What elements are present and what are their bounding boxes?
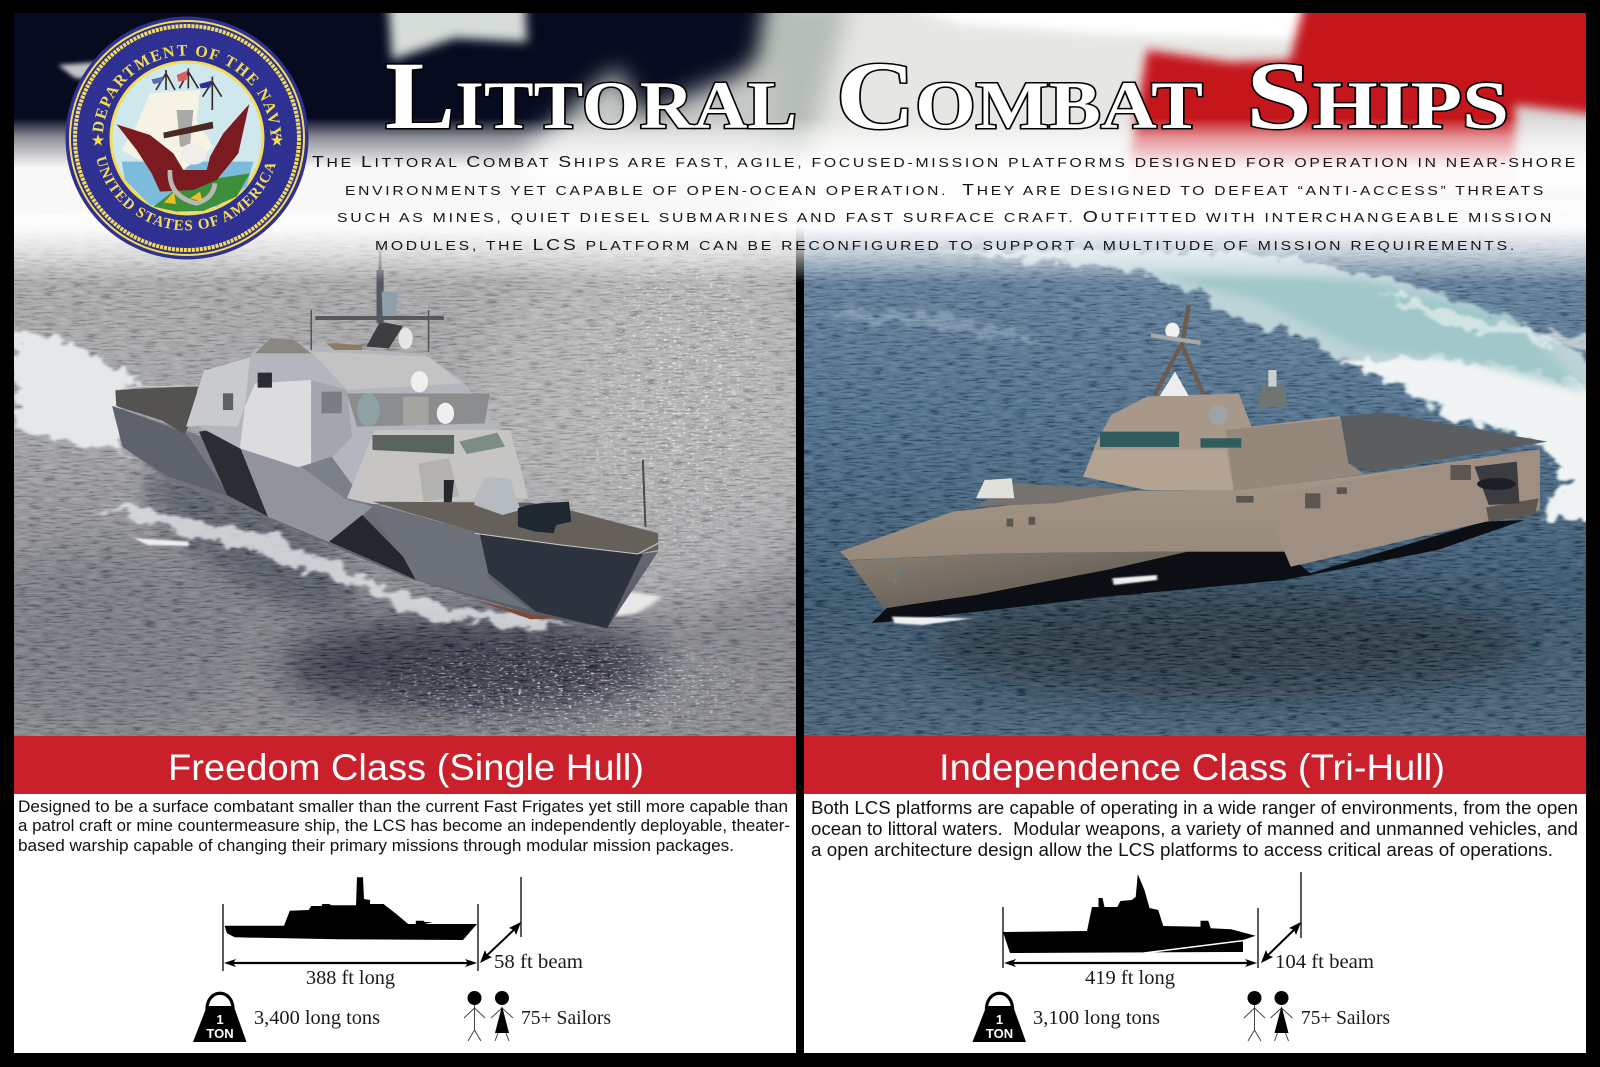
bridge block xyxy=(347,430,528,504)
heading band: Freedom class xyxy=(14,736,796,794)
icon: one ton weight xyxy=(972,993,1026,1042)
hull underside shadow xyxy=(871,520,1524,623)
seal: Department of the Navy xyxy=(66,16,308,260)
heading band: Freedom class: Freedom Class (Single Hull) xyxy=(168,747,644,788)
header white fade xyxy=(14,118,1586,283)
superstructure xyxy=(1083,393,1364,491)
photo: Independence class trimaran at sea xyxy=(804,200,1596,736)
intro paragraph: SUCH AS MINES, QUIET DIESEL SUBMARINES AND FAST SURFACE CRAFT. O UTFITTED WITH INTERCHANGEABLE MISSION xyxy=(337,209,1554,226)
intro paragraph: ENVIRONMENTS YET CAPABLE OF OPEN-OCEAN OPERATION. THEY ARE DESIGNED TO DEFEAT “ANTI-ACCESS” THREATS xyxy=(345,182,1546,199)
flag: stars xyxy=(388,0,527,60)
panel: Freedom class xyxy=(14,736,796,1053)
beam label: 58 ft beam xyxy=(494,952,583,973)
panel background xyxy=(14,794,796,1053)
length label: 419 ft long xyxy=(1085,968,1175,989)
bow jackstaff xyxy=(643,460,645,527)
crew on deck xyxy=(518,502,571,533)
main hull xyxy=(840,449,1540,567)
flag: white stripe xyxy=(756,13,1302,167)
description text: a patrol craft or mine countermeasure ship, the LCS has become an independently deployable, theater- xyxy=(18,816,790,835)
photo: Freedom class ship at sea xyxy=(14,228,796,736)
bow lower hull xyxy=(848,552,1188,608)
panel background xyxy=(804,794,1586,1053)
heading band: Independence class xyxy=(804,736,1586,794)
icon: one ton weight: 1 xyxy=(996,1012,1003,1027)
seal lettering: UNITED STATES OF AMERICA xyxy=(97,156,276,230)
description text: Both LCS platforms are capable of operating in a wide ranger of environments, from the open xyxy=(811,797,1578,818)
flight deck xyxy=(1341,413,1547,472)
mast xyxy=(366,322,403,348)
hull xyxy=(112,406,658,628)
description text: based warship capable of changing their primary missions through modular mission packages. xyxy=(18,836,734,855)
ship silhouette: Independence xyxy=(1003,874,1256,953)
description text xyxy=(18,797,790,855)
description text xyxy=(811,797,1578,860)
beam label: 104 ft beam xyxy=(1275,952,1374,973)
black column divider xyxy=(796,245,804,736)
intro paragraph: THE LITTORAL C OMBAT SHIPS ARE FAST, AGILE, FOCUSED-MISSION PLATFORMS DESIGNED FOR OPERATION IN NEAR-SHORE xyxy=(312,154,1578,171)
icon: one ton weight: TON xyxy=(986,1026,1013,1041)
icon: one ton weight: 1 xyxy=(216,1012,224,1027)
length dimension xyxy=(1003,907,1258,968)
mast xyxy=(1155,305,1203,395)
icon: sailors xyxy=(464,991,513,1041)
photo: Independence class trimaran at sea: 4 xyxy=(884,566,901,588)
CIWS xyxy=(1257,385,1287,408)
length label: 388 ft long xyxy=(306,968,395,989)
boat bay xyxy=(1474,462,1519,505)
wake: stern foam xyxy=(14,330,138,450)
foam along hull xyxy=(892,617,973,625)
radar housing band xyxy=(347,393,490,427)
domes xyxy=(357,393,380,427)
wake: bow foam xyxy=(97,507,577,628)
foredeck xyxy=(372,502,658,554)
beam dimension xyxy=(1261,872,1301,963)
seal lettering: DEPARTMENT OF THE NAVY xyxy=(92,44,282,138)
flag backdrop and fade xyxy=(14,13,1586,167)
intro paragraph xyxy=(312,154,1578,254)
title: LITTORAL xyxy=(385,42,797,149)
description text: ocean to littoral waters. Modular weapons, a variety of manned and unmanned vehicles, and xyxy=(811,818,1578,839)
title xyxy=(385,42,1509,149)
forward gun xyxy=(976,483,1137,507)
wake: curving foam xyxy=(933,250,1596,520)
seal lettering: ★ xyxy=(92,133,105,149)
hull ports xyxy=(1007,465,1471,527)
sailors label: 75+ Sailors xyxy=(521,1008,611,1029)
superstructure xyxy=(186,345,528,508)
windows xyxy=(258,373,272,388)
ship silhouette: Freedom xyxy=(224,877,477,940)
seal lettering xyxy=(92,44,284,230)
gun turret xyxy=(474,477,520,515)
intro paragraph: MODULES, THE LCS PLATFORM CAN BE RECONFIGURED TO SUPPORT A MULTITUDE OF MISSION REQUIREMENTS. xyxy=(375,237,1517,254)
flag: red stripe xyxy=(1126,13,1586,167)
bridge windows xyxy=(1100,432,1241,448)
icon: sailors xyxy=(1244,991,1292,1041)
description text: a open architecture design allow the LCS platforms to access critical areas of operations. xyxy=(811,839,1553,860)
sailors label: 75+ Sailors xyxy=(1301,1008,1390,1029)
flag: navy canton xyxy=(14,13,772,152)
title: COMBAT xyxy=(836,42,1203,149)
title: SHIPS xyxy=(1246,42,1509,149)
weight label: 3,100 long tons xyxy=(1033,1008,1160,1029)
panel: Independence class xyxy=(804,736,1586,1053)
icon: one ton weight: TON xyxy=(206,1026,234,1041)
heading band: Independence class: Independence Class (Tri-Hull) xyxy=(939,747,1445,788)
seal lettering: ★ xyxy=(271,133,284,149)
icon: one ton weight xyxy=(193,993,246,1042)
description text: Designed to be a surface combatant smaller than the current Fast Frigates yet still more capable than xyxy=(18,797,788,816)
beam dimension xyxy=(480,877,521,963)
weight label: 3,400 long tons xyxy=(254,1008,380,1029)
length dimension xyxy=(223,904,478,971)
seal emblem: ship, anchor and eagle xyxy=(117,68,253,212)
dome xyxy=(1209,405,1228,425)
aft deck xyxy=(115,386,198,434)
